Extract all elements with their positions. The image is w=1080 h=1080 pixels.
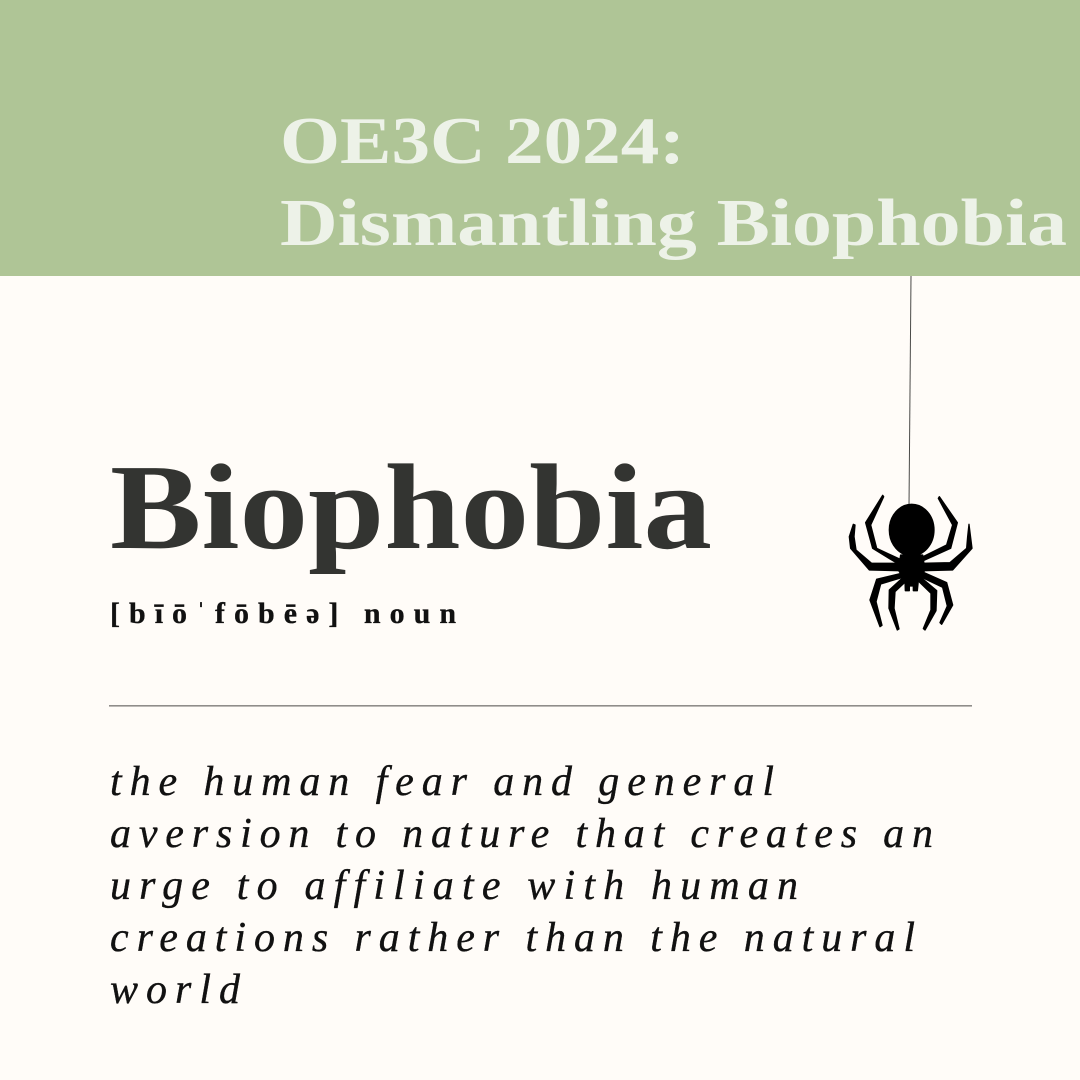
header band — [0, 0, 1080, 276]
definition text — [110, 759, 933, 1013]
definition text: the human fear and general — [110, 759, 774, 805]
title: OE3C 2024: — [280, 104, 685, 178]
icon: spider — [849, 495, 972, 630]
definition text: world — [110, 967, 241, 1013]
pronunciation: [bīōˈfōbēə] noun — [110, 597, 456, 630]
definition text: urge to affiliate with human — [110, 863, 798, 909]
definition text: creations rather than the natural — [110, 915, 915, 961]
spider thread — [909, 276, 911, 506]
title: Dismantling Biophobia — [280, 186, 1067, 260]
title — [280, 104, 1067, 260]
definition text: aversion to nature that creates an — [110, 811, 933, 857]
heading: Biophobia: Biophobia — [110, 440, 712, 575]
divider — [109, 705, 972, 707]
